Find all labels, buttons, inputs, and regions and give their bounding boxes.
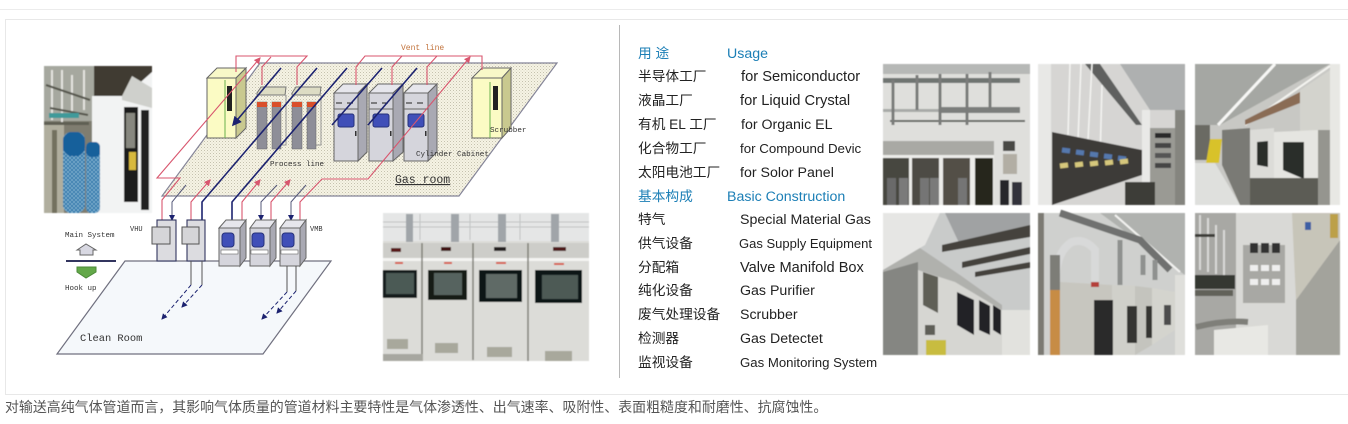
construction rows: Valve Manifold Box [740, 260, 865, 276]
panel: usage and basic construction list [638, 45, 877, 370]
caption: 对输送高纯气体管道而言，其影响气体质量的管道材料主要特性是气体渗透性、出气速率、吸附性、表面粗糙度和耐磨性、抗腐蚀性。 [5, 399, 827, 415]
diagram labels: Scrubber [490, 127, 526, 135]
divider [619, 25, 620, 378]
construction rows: 特气 [638, 212, 666, 227]
photo: row of gas cabinets [383, 213, 589, 361]
vent lines [157, 56, 482, 220]
construction rows: Gas Detectet [740, 331, 823, 347]
usage rows: for Organic EL [741, 117, 833, 133]
usage rows [638, 69, 862, 181]
heading: usage: 用 途 [638, 45, 669, 61]
left scrubber cabinet [207, 68, 246, 138]
construction rows: Scrubber [740, 307, 798, 323]
usage rows: for Semiconductor [741, 69, 860, 85]
usage rows: for Compound Devic [740, 141, 862, 156]
cylinder cabinets [334, 84, 437, 161]
VMB units [219, 220, 306, 266]
gas cylinders and regulators [257, 87, 321, 149]
heading: usage [638, 45, 768, 62]
photo: gas cabinet with cylinders [44, 66, 152, 213]
heading: basic construction: 基本构成 [638, 188, 693, 204]
construction rows: Special Material Gas [740, 212, 871, 228]
right scrubber cabinet [472, 68, 511, 138]
usage rows: 化合物工厂 [638, 141, 706, 156]
usage rows: 液晶工厂 [638, 93, 693, 108]
panel: gas system diagram [57, 44, 557, 354]
construction rows: 检测器 [638, 331, 679, 346]
photo: cabinets under pipework [1038, 213, 1185, 355]
heading: basic construction: Basic Construction [727, 189, 845, 205]
main system and hook up legend: Hook up [65, 285, 97, 293]
usage rows: 有机 EL 工厂 [638, 117, 717, 132]
usage rows: for Liquid Crystal [740, 93, 850, 109]
main system and hook up legend [65, 232, 116, 293]
heading: basic construction [638, 188, 845, 205]
main system and hook up legend: Main System [65, 232, 115, 240]
construction rows: 废气处理设备 [638, 306, 720, 322]
diagram labels: VMB [310, 226, 323, 234]
clean room floor [57, 261, 331, 354]
usage rows: 半导体工厂 [638, 69, 706, 84]
heading: usage: Usage [727, 46, 768, 62]
diagram labels: Cylinder Cabinet [416, 151, 489, 159]
construction rows: 分配箱 [638, 260, 679, 275]
diagram labels: Clean Room [80, 333, 142, 345]
photo: control cabinets angled view [883, 213, 1030, 355]
dashed supply arrows [162, 261, 296, 319]
diagram labels [80, 44, 526, 345]
photo: valve boards and scrubber box [1195, 213, 1340, 355]
construction rows: Gas Supply Equipment [739, 236, 872, 251]
diagram labels: Vent line [401, 44, 444, 53]
construction rows: Gas Monitoring System [740, 355, 877, 370]
VHU units [152, 220, 205, 261]
construction rows: 供气设备 [638, 235, 693, 251]
construction rows [638, 212, 877, 370]
usage rows: for Solor Panel [740, 165, 834, 181]
top rule [0, 9, 1348, 10]
construction rows: 监视设备 [638, 354, 693, 370]
diagram labels: VHU [130, 226, 143, 234]
photo: cabinet aisle with yellow door [1195, 64, 1340, 205]
gas room floor [162, 63, 557, 196]
diagram labels: Gas room [395, 174, 450, 187]
photo: valve panel corridor [1038, 64, 1185, 205]
process lines [172, 68, 417, 220]
diagram labels: Process line [270, 161, 324, 169]
usage rows: 太阳电池工厂 [638, 165, 720, 180]
construction rows: 纯化设备 [638, 282, 693, 298]
photo: cylinder cabinets and pipes [883, 64, 1030, 205]
construction rows: Gas Purifier [740, 283, 815, 299]
